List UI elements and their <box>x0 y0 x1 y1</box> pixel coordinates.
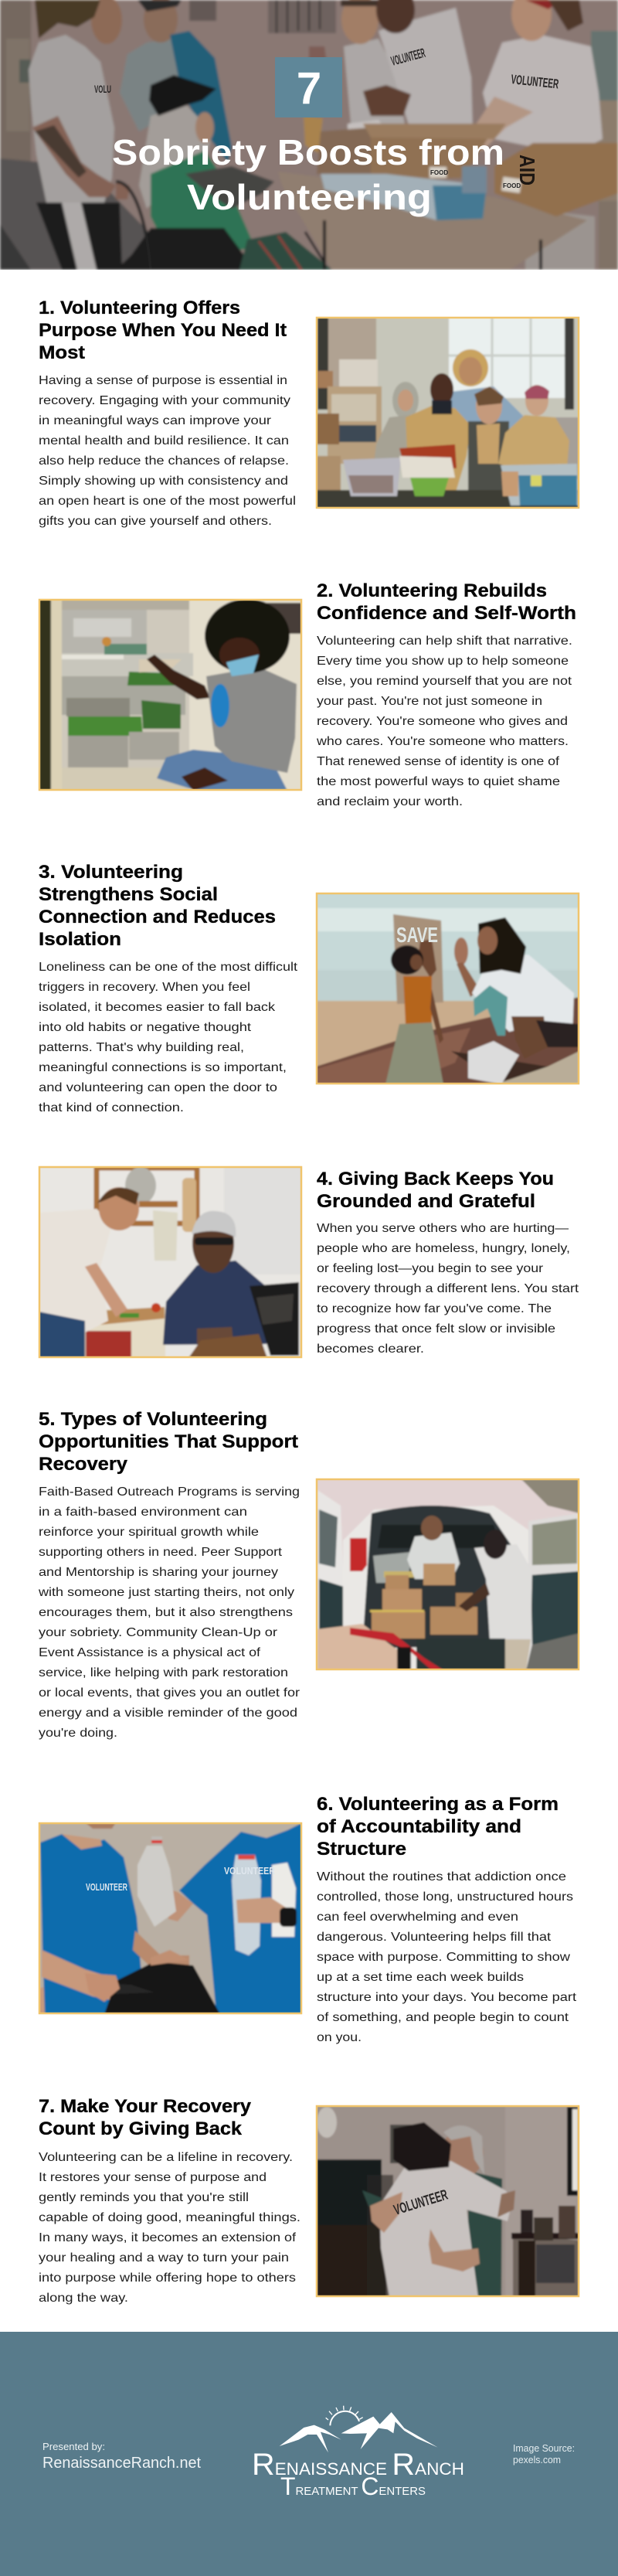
body text 2: the most powerful ways to quiet shame <box>317 775 560 788</box>
heading 3: Strengthens Social <box>39 884 218 905</box>
body text 5: and Mentorship is sharing your journey <box>39 1566 278 1579</box>
heading 4 <box>317 1169 554 1212</box>
title: Volunteering <box>187 177 432 217</box>
heading 1: Most <box>39 342 85 363</box>
photo: woman and child high five on beach <box>316 893 579 1084</box>
body text 4: to recognize how far you've come. The <box>317 1302 552 1315</box>
heading 7: 7. Make Your Recovery <box>39 2096 252 2117</box>
body text 5: with someone just starting theirs, not only <box>38 1586 294 1599</box>
body text 6: of something, and people begin to count <box>317 2011 569 2024</box>
body text 1: in meaningful ways can improve your <box>39 414 272 427</box>
photo: young man cooking with older man <box>39 1166 302 1358</box>
body text 4: becomes clearer. <box>317 1342 424 1356</box>
body text 5: supporting others in need. Peer Support <box>39 1546 283 1559</box>
panel: section 7 <box>39 2096 579 2305</box>
body text 2: That renewed sense of identity is one of <box>317 755 560 768</box>
title: Sobriety Boosts from <box>112 132 504 172</box>
body text 3: patterns. That's why building real, <box>39 1041 244 1054</box>
body text 2: who cares. You're someone who matters. <box>316 735 569 748</box>
number badge <box>275 57 342 117</box>
heading 7: Count by Giving Back <box>39 2118 243 2139</box>
heading 3: Isolation <box>39 929 121 950</box>
body text 7: your healing and a way to turn your pain <box>39 2251 289 2265</box>
body text 7: In many ways, it becomes an extension of <box>39 2231 297 2244</box>
body text 1: recovery. Engaging with your community <box>39 394 290 407</box>
panel: section 2 <box>39 580 576 808</box>
body text 5: reinforce your spiritual growth while <box>39 1526 259 1539</box>
panel: section 6 <box>39 1794 577 2044</box>
body text 7 <box>39 2151 301 2305</box>
heading 6: 6. Volunteering as a Form <box>317 1794 559 1815</box>
body text 1: Having a sense of purpose is essential in <box>39 374 287 387</box>
body text 6 <box>317 1870 577 2044</box>
body text 1 <box>39 374 296 528</box>
shirt lettering <box>86 1865 276 1893</box>
panel: section 4 <box>39 1166 579 1358</box>
heading 7 <box>39 2096 252 2139</box>
body text 3: triggers in recovery. When you feel <box>39 981 250 994</box>
body text 2: Volunteering can help shift that narrative. <box>317 635 572 648</box>
body text 4: progress that once felt slow or invisible <box>317 1322 555 1336</box>
body text 1: an open heart is one of the most powerful <box>39 495 296 508</box>
body text 5: encourages them, but it also strengthens <box>39 1606 293 1619</box>
hero photo: volunteers handing out food and water <box>0 0 618 270</box>
photo: volunteers with donation bins <box>316 317 579 509</box>
presented by credit: RenaissanceRanch.net <box>42 2455 201 2472</box>
body text 3: that kind of connection. <box>39 1101 184 1114</box>
body text 6: structure into your days. You become part <box>317 1991 577 2004</box>
heading 5: Recovery <box>39 1454 128 1475</box>
heading 2: 2. Volunteering Rebuilds <box>317 580 547 601</box>
body text 3: Loneliness can be one of the most difficult <box>39 961 298 974</box>
heading 5: 5. Types of Volunteering <box>39 1409 267 1430</box>
heading 3: Connection and Reduces <box>39 907 276 927</box>
t-shirt print words: VOLU <box>94 83 111 95</box>
body text 5: Faith-Based Outreach Programs is serving <box>39 1485 300 1499</box>
body text 5 <box>38 1485 301 1740</box>
body text 5: energy and a visible reminder of the good <box>39 1707 297 1720</box>
photo: volunteers loading a van <box>316 1479 579 1670</box>
body text 1: mental health and build resilience. It can <box>39 434 289 447</box>
number badge: 7 <box>297 63 321 114</box>
heading 1 <box>39 298 287 363</box>
body text 1: also help reduce the chances of relapse. <box>39 454 289 468</box>
t-shirt print words: FOOD <box>430 169 448 176</box>
body text 3: into old habits or negative thought <box>39 1021 252 1034</box>
image source credit <box>513 2443 575 2465</box>
footer panel <box>0 2332 618 2576</box>
t-shirt print words: AID <box>515 155 539 185</box>
heading 2 <box>317 580 576 624</box>
shirt lettering: VOLUNTEER <box>392 2187 450 2219</box>
body text 2: recovery. You're someone who gives and <box>317 715 568 728</box>
heading 4: Grounded and Grateful <box>317 1191 535 1212</box>
body text 7: Volunteering can be a lifeline in recovery. <box>39 2151 293 2164</box>
heading 3: 3. Volunteering <box>39 862 183 883</box>
body text 4: or feeling lost—you begin to see your <box>317 1262 544 1275</box>
image source credit: Image Source: <box>513 2443 575 2454</box>
heading 3 <box>39 862 276 950</box>
body text 2: your past. You're not just someone in <box>317 695 542 708</box>
heading 6 <box>317 1794 559 1860</box>
body text 2: and reclaim your worth. <box>317 795 463 808</box>
heading 4: 4. Giving Back Keeps You <box>317 1169 554 1189</box>
body text 4: people who are homeless, hungry, lonely, <box>317 1242 570 1255</box>
body text 6: up at a set time each week builds <box>317 1971 524 1984</box>
heading 6: Structure <box>317 1839 406 1860</box>
body text 7: into purpose while offering hope to others <box>39 2271 296 2285</box>
photo: two volunteers collecting plastic bottles <box>39 1822 303 2014</box>
panel: section 5 <box>38 1409 579 1740</box>
body text 6: on you. <box>317 2031 362 2044</box>
body text 3: meaningful connections is so important, <box>39 1061 287 1074</box>
title <box>112 132 504 217</box>
t-shirt print words: VOLUNTEER <box>389 46 427 69</box>
shirt lettering: VOLUNTEER <box>224 1865 276 1877</box>
body text 2: else, you remind yourself that you are not <box>317 675 572 688</box>
body text 7: It restores your sense of purpose and <box>39 2171 267 2184</box>
t-shirt print words: VOLUNTEER <box>511 72 559 91</box>
photo: woman stocking a community fridge <box>39 599 302 791</box>
heading 1: Purpose When You Need It <box>39 320 287 341</box>
logo: Renaissance Ranch Treatment Centers: TREATMENT CENTERS <box>280 2472 426 2500</box>
heading 5: Opportunities That Support <box>39 1431 298 1452</box>
hero banner <box>0 0 618 270</box>
body text 1: Simply showing up with consistency and <box>39 475 288 488</box>
body text 6: can feel overwhelming and even <box>317 1911 518 1924</box>
t-shirt print words: FOOD <box>503 182 521 189</box>
body text 6: controlled, those long, unstructured hours <box>317 1890 573 1904</box>
body text 1: gifts you can give yourself and others. <box>39 515 272 528</box>
panel: section 3 <box>39 862 579 1114</box>
t-shirt print words <box>94 46 559 189</box>
heading 5 <box>39 1409 298 1475</box>
logo: Renaissance Ranch Treatment Centers: RENAISSANCE RANCH <box>252 2448 464 2482</box>
shirt lettering: VOLUNTEER <box>86 1881 127 1893</box>
body text 4: recovery through a different lens. You start <box>317 1282 579 1295</box>
body text 5: service, like helping with park restoration <box>39 1666 288 1679</box>
body text 6: dangerous. Volunteering helps fill that <box>317 1931 552 1944</box>
body text 3: isolated, it becomes easier to fall back <box>39 1001 276 1014</box>
photo: volunteer hugging an older man <box>316 2105 579 2297</box>
body text 3: and volunteering can open the door to <box>39 1081 277 1094</box>
body text 4: When you serve others who are hurting— <box>317 1222 569 1235</box>
body text 4 <box>317 1222 579 1356</box>
body text 6: space with purpose. Committing to show <box>317 1951 570 1964</box>
heading 2: Confidence and Self-Worth <box>317 603 576 624</box>
body text 2: Every time you show up to help someone <box>317 655 569 668</box>
image source credit: pexels.com <box>513 2455 561 2465</box>
body text 5: or local events, that gives you an outlet for <box>39 1686 301 1700</box>
logo: Renaissance Ranch Treatment Centers <box>252 2406 464 2500</box>
body text 7: along the way. <box>39 2292 128 2305</box>
presented by credit <box>42 2442 201 2472</box>
body text 7: capable of doing good, meaningful things. <box>39 2211 301 2224</box>
sign lettering: SAVE <box>396 923 438 947</box>
heading 1: 1. Volunteering Offers <box>39 298 240 318</box>
presented by credit: Presented by: <box>42 2442 105 2452</box>
heading 6: of Accountability and <box>317 1816 521 1837</box>
body text 2 <box>316 635 572 808</box>
body text 5: Event Assistance is a physical act of <box>39 1646 261 1659</box>
body text 7: gently reminds you that you're still <box>39 2191 249 2204</box>
body text 3 <box>39 961 298 1114</box>
body text 6: Without the routines that addiction once <box>317 1870 566 1884</box>
body text 5: your sobriety. Community Clean-Up or <box>39 1626 278 1639</box>
panel: section 1 <box>39 298 579 528</box>
body text 5: you're doing. <box>39 1727 117 1740</box>
body text 5: in a faith-based environment can <box>39 1506 247 1519</box>
